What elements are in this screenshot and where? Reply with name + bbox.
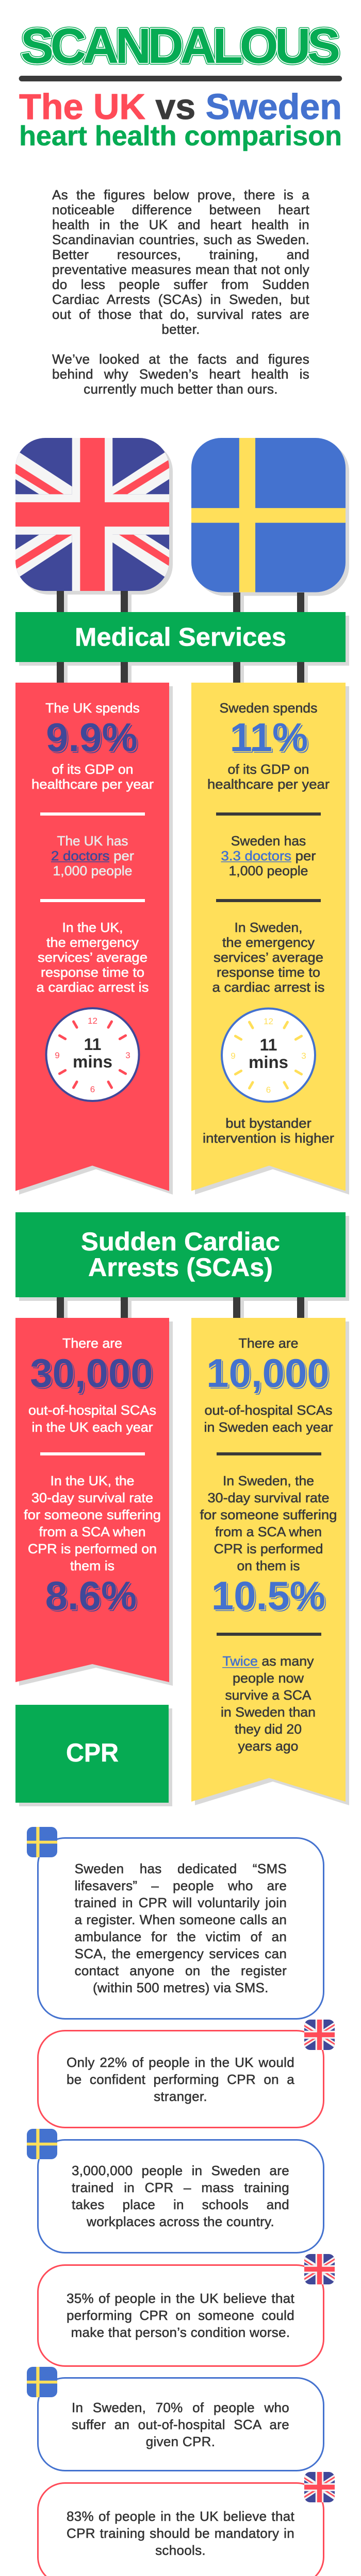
UK GDP spend: 9.9% — [46, 715, 138, 760]
bystander note: intervention is higher — [203, 1130, 334, 1146]
intro paragraph: Better resources, training, and — [52, 247, 309, 262]
callout: UK mandatory CPR training: schools. — [155, 2542, 206, 2557]
intro paragraph: We’ve looked at the facts and figures — [52, 351, 309, 367]
callout: Sweden 70% given CPR: In Sweden, 70% of people who — [72, 2400, 289, 2415]
Twice as many note: in Sweden than — [221, 1704, 316, 1720]
UK GDP spend: healthcare per year — [31, 776, 154, 792]
heading banner: CPR: CPR — [66, 1738, 119, 1767]
connecting posts — [55, 591, 308, 2576]
bystander note: but bystander — [225, 1115, 311, 1131]
callout: Sweden SMS lifesavers: lifesavers” – people who are — [75, 1877, 287, 1893]
heading banner: Sudden Cardiac Arrests: Arrests (SCAs) — [88, 1253, 273, 1282]
Sweden response time text — [212, 920, 325, 995]
UK response time text: response time to — [41, 964, 144, 980]
heading banner: CPR — [15, 1705, 172, 1806]
panel: Sweden sudden cardiac arrests — [191, 1318, 349, 1805]
UK survival rate: from a SCA when — [39, 1524, 145, 1539]
subtitle: The UK vs Sweden: The UK vs Sweden — [19, 87, 342, 127]
callout: Sweden 3,000,000 trained — [27, 2129, 324, 2253]
clock: Sweden 11 mins: 11 — [260, 1036, 277, 1054]
Twice as many note: survive a SCA — [225, 1687, 311, 1703]
UK survival rate: In the UK, the — [51, 1473, 134, 1488]
UK doctors: 2 doctors per — [51, 848, 134, 863]
callout: Sweden SMS lifesavers: Sweden has dedicated “SMS — [75, 1861, 287, 1876]
UK GDP spend — [31, 700, 154, 792]
callout: UK confidence performing CPR: Only 22% of people in the UK would — [67, 2055, 294, 2070]
Sweden survival rate: 10.5% — [213, 1574, 327, 1620]
Sweden survival rate: In Sweden, the — [223, 1473, 314, 1488]
Sweden survival rate: 10.5% — [211, 1573, 325, 1618]
UK SCA count: There are — [62, 1335, 122, 1351]
Twice as many note: Twice as many — [223, 1653, 314, 1669]
callout: Sweden 3,000,000 trained: 3,000,000 people in Sweden are — [72, 2163, 289, 2178]
UK survival rate: 8.6% — [46, 1573, 138, 1619]
UK survival rate: for someone suffering — [24, 1507, 161, 1522]
UK survival rate: 8.6% — [47, 1574, 138, 1620]
Sweden SCA count: out-of-hospital SCAs — [204, 1402, 332, 1418]
UK doctors: 1,000 people — [53, 863, 132, 878]
UK response time text: In the UK, — [62, 920, 123, 935]
Sweden response time text: a cardiac arrest is — [212, 979, 325, 995]
callout: Sweden 3,000,000 trained: trained in CPR – mass training — [72, 2179, 289, 2195]
UK response time text — [36, 920, 149, 995]
callout: UK mandatory CPR training — [37, 2472, 335, 2576]
callout: UK belief CPR could make worse — [37, 2254, 335, 2367]
heading banner: Medical Services — [15, 612, 349, 666]
UK survival rate: them is — [70, 1558, 114, 1573]
callout: Sweden SMS lifesavers — [27, 1827, 324, 2020]
Sweden survival rate: for someone suffering — [200, 1507, 337, 1522]
heading banner: Medical Services: Medical Services — [75, 622, 286, 651]
Sweden SCA count: 10,000 — [208, 1352, 331, 1397]
intro paragraph: Scandinavian countries, such as Sweden. — [52, 232, 309, 247]
Sweden GDP spend: 11% — [230, 715, 308, 760]
intro paragraph: better. — [161, 321, 200, 337]
panel: UK sudden cardiac arrests — [15, 1318, 173, 1686]
Sweden GDP spend: of its GDP on — [228, 761, 309, 777]
UK GDP spend: The UK spends — [45, 700, 140, 716]
intro paragraph: noticeable difference between heart — [52, 202, 309, 217]
callout: UK belief CPR could make worse: 35% of people in the UK believe that — [67, 2291, 294, 2306]
Sweden GDP spend: 11% — [232, 716, 309, 761]
clock: Sweden 11 mins: mins — [249, 1053, 288, 1072]
callout: Sweden SMS lifesavers: ambulance for the victim of an — [75, 1929, 287, 1944]
Sweden GDP spend: Sweden spends — [220, 700, 318, 716]
Sweden SCA count — [204, 1335, 333, 1435]
UK SCA count — [28, 1335, 156, 1435]
clock: UK 11 mins: 6 — [90, 1084, 95, 1094]
UK response time text: the emergency — [46, 935, 139, 950]
clock: Sweden 11 mins: 12 — [264, 1016, 273, 1026]
clock: UK 11 mins: mins — [73, 1052, 112, 1071]
intro paragraph — [52, 187, 309, 397]
UK survival rate: 30-day survival rate — [31, 1490, 153, 1505]
UK SCA count: 30,000 — [31, 1352, 155, 1397]
clock: Sweden 11 mins: 6 — [266, 1085, 271, 1095]
callout: Sweden SMS lifesavers: trained in CPR will voluntarily join — [75, 1895, 287, 1910]
Sweden SCA count: in Sweden each year — [204, 1419, 333, 1435]
callout: Sweden 70% given CPR — [27, 2367, 324, 2471]
clock: UK 11 mins: 12 — [88, 1016, 97, 1026]
UK SCA count: 30,000 — [30, 1350, 153, 1396]
Sweden doctors: 3.3 doctors per — [221, 848, 316, 863]
Sweden GDP spend — [207, 700, 330, 792]
title: SCANDALOUS: SCANDALOUS — [21, 19, 340, 74]
Sweden GDP spend: healthcare per year — [207, 776, 330, 792]
clock: UK 11 mins — [46, 1008, 139, 1101]
intro paragraph: Cardiac Arrests (SCAs) in Sweden, but — [52, 292, 309, 307]
Twice as many note: people now — [233, 1670, 304, 1686]
intro paragraph: health in the UK and heart health in — [52, 217, 309, 232]
Sweden doctors — [221, 833, 316, 878]
Twice as many note: they did 20 — [235, 1721, 302, 1737]
UK SCA count: 30,000 — [31, 1351, 154, 1396]
intro paragraph: out of those that do, survival rates are — [52, 307, 309, 322]
Sweden response time text: In Sweden, — [234, 920, 302, 935]
UK SCA count: out-of-hospital SCAs — [28, 1402, 156, 1418]
UK survival rate: CPR is performed on — [28, 1541, 157, 1556]
bystander note — [203, 1115, 334, 1146]
UK doctors — [51, 833, 134, 878]
clock: UK 11 mins: 9 — [55, 1050, 60, 1060]
panel: Sweden medical services — [191, 683, 349, 1195]
title: SCANDALOUS: SCANDALOUS — [21, 19, 340, 74]
Sweden doctors: Sweden has — [231, 833, 306, 849]
callout: Sweden 70% given CPR: given CPR. — [146, 2434, 215, 2449]
clock: Sweden 11 mins: 3 — [301, 1051, 306, 1061]
clock: UK 11 mins: 11 — [84, 1035, 101, 1054]
Sweden SCA count: 10,000 — [206, 1350, 330, 1396]
callout: Sweden SMS lifesavers: (within 500 metres) via SMS. — [93, 1979, 269, 1995]
Sweden response time text: the emergency — [222, 935, 315, 950]
Twice as many note — [221, 1653, 316, 1754]
heading banner: Sudden Cardiac Arrests: Sudden Cardiac — [81, 1227, 280, 1256]
Sweden doctors: 1,000 people — [229, 863, 308, 878]
subtitle: heart health comparison: heart health comparison — [19, 121, 342, 151]
heading banner: Sudden Cardiac Arrests — [15, 1212, 349, 1301]
Sweden SCA count: 10,000 — [207, 1351, 330, 1396]
infographic artwork canvas — [15, 27, 349, 1806]
Sweden GDP spend: 11% — [231, 715, 309, 760]
Sweden survival rate: 10.5% — [212, 1573, 326, 1619]
Sweden survival rate: from a SCA when — [215, 1524, 322, 1539]
title divider bar — [19, 76, 342, 81]
title: SCANDALOUS: SCANDALOUS — [21, 19, 340, 74]
Sweden survival rate: CPR is performed — [214, 1541, 323, 1556]
flag: Sweden — [191, 438, 349, 596]
callout: Sweden SMS lifesavers: SCA, the emergency services can — [75, 1945, 287, 1961]
UK SCA count: in the UK each year — [32, 1419, 153, 1435]
clock: Sweden 11 mins: 9 — [231, 1051, 236, 1061]
intro paragraph: preventative measures mean that not only — [52, 262, 309, 277]
clock: UK 11 mins: 3 — [125, 1050, 130, 1060]
callout: Sweden 3,000,000 trained: takes place in schools and — [72, 2197, 289, 2212]
callout: UK mandatory CPR training: CPR training should be mandatory in — [67, 2526, 294, 2541]
Sweden survival rate: on them is — [237, 1558, 300, 1573]
callout: UK confidence performing CPR: stranger. — [154, 2089, 207, 2104]
UK GDP spend: of its GDP on — [52, 761, 133, 777]
callout: Sweden SMS lifesavers: a register. When someone calls an — [75, 1911, 287, 1927]
callout: Sweden SMS lifesavers: contact anyone on the register — [75, 1963, 287, 1978]
callout: UK belief CPR could make worse: make that person’s condition worse. — [71, 2325, 290, 2340]
callout: Sweden 70% given CPR: suffer an out-of-hospital SCA are — [72, 2416, 289, 2432]
intro paragraph: As the figures below prove, there is a — [52, 187, 309, 202]
intro paragraph: do less people suffer from Sudden — [52, 277, 309, 292]
flag: United Kingdom — [9, 438, 175, 595]
UK response time text: a cardiac arrest is — [36, 979, 149, 995]
callout: Sweden 3,000,000 trained: workplaces across the country. — [87, 2213, 274, 2229]
UK survival rate — [24, 1473, 161, 1620]
callout: UK mandatory CPR training: 83% of people in the UK believe that — [67, 2508, 294, 2523]
Sweden response time text: services’ average — [214, 950, 323, 965]
UK GDP spend: 9.9% — [47, 716, 139, 761]
callout: UK confidence performing CPR: be confident performing CPR on a — [67, 2071, 294, 2087]
clock: Sweden 11 mins — [222, 1009, 315, 1101]
intro paragraph: currently much better than ours. — [84, 381, 278, 397]
Sweden SCA count: There are — [238, 1335, 298, 1351]
panel: UK medical services — [15, 683, 173, 1195]
Twice as many note: years ago — [238, 1738, 298, 1754]
callout: UK belief CPR could make worse: performing CPR on someone could — [67, 2307, 294, 2323]
callout: UK confidence performing CPR — [37, 2020, 335, 2128]
Sweden survival rate — [200, 1473, 337, 1620]
UK GDP spend: 9.9% — [47, 715, 138, 760]
intro paragraph: behind why Sweden’s heart health is — [52, 366, 309, 382]
Sweden response time text: response time to — [217, 964, 320, 980]
Sweden survival rate: 30-day survival rate — [207, 1490, 329, 1505]
UK survival rate: 8.6% — [45, 1573, 137, 1618]
UK doctors: The UK has — [57, 833, 128, 849]
UK response time text: services’ average — [38, 950, 147, 965]
